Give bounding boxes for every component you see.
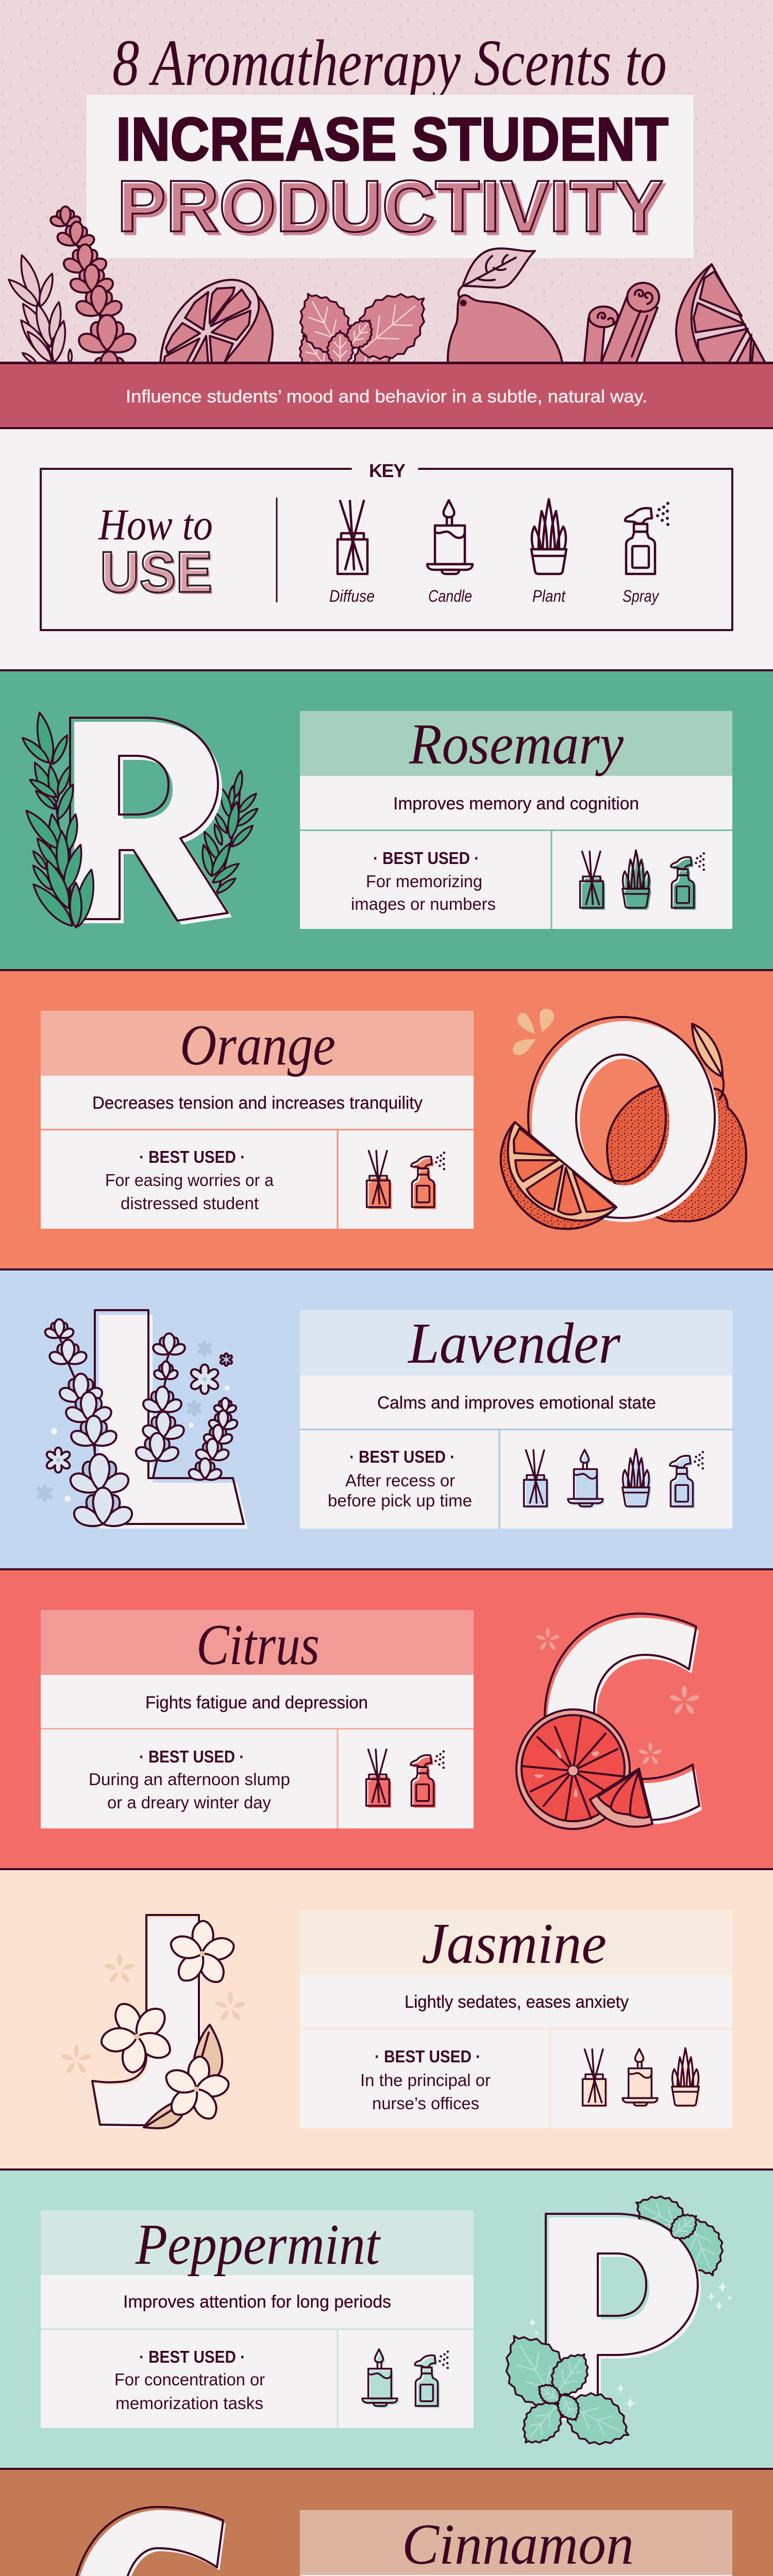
sparkles [528, 2280, 731, 2411]
lavender best used: After recess or [345, 1471, 455, 1490]
section: rosemary [0, 670, 773, 970]
jasmine background [0, 1869, 773, 2170]
mint leaves front [489, 2208, 703, 2457]
lavender best used: · BEST USED · [349, 1447, 455, 1466]
lavender sprigs [45, 1319, 237, 1526]
orange best used: For easing worries or a [105, 1171, 274, 1190]
panel body [300, 1910, 732, 2128]
panel: citrus [41, 1610, 474, 1828]
illustration: rosemary sprig [5, 253, 72, 365]
key: diffuse: Diffuse [329, 587, 375, 605]
title: increase student: INCREASE STUDENT [116, 105, 668, 174]
jasmine best used: In the principal or [360, 2071, 491, 2090]
citrus best used [89, 1747, 290, 1812]
how to use heading [98, 500, 214, 606]
lavender background [0, 1269, 773, 1569]
panel body [41, 1011, 474, 1229]
key: spray [623, 502, 669, 605]
key: candle [427, 500, 473, 605]
how to use heading: How to [98, 500, 213, 549]
header background [0, 0, 773, 364]
panel: jasmine [300, 1910, 732, 2128]
key: plant [531, 499, 566, 605]
illustration: orange wedge [676, 264, 767, 367]
rosemary best used: · BEST USED · [373, 849, 479, 868]
peppermint background [0, 2170, 773, 2469]
citrus background [0, 1569, 773, 1869]
title band [300, 2510, 732, 2575]
orange benefit: Decreases tension and increases tranquility [92, 1093, 423, 1113]
lavender best used: before pick up time [328, 1491, 472, 1510]
panel: rosemary [300, 711, 732, 929]
tagline: Influence students’ mood and behavior in a subtle, natural way. [126, 387, 647, 406]
section: peppermint [0, 2170, 773, 2469]
citrus icons [366, 1750, 447, 1808]
section: citrus [0, 1569, 773, 1869]
key heading: KEY [369, 460, 406, 481]
letter C [545, 1614, 702, 1824]
title band [41, 2210, 474, 2275]
decorative blooms [535, 1628, 700, 1766]
orange best used: distressed student [121, 1194, 259, 1213]
title script line: 8 Aromatherapy Scents to [112, 26, 667, 99]
section: cinnamon [0, 2469, 773, 2576]
lavender benefit: Calms and improves emotional state [377, 1393, 656, 1413]
title: productivity: PRODUCTIVITY [120, 168, 666, 250]
rosemary left sprig [20, 711, 98, 931]
separators [300, 2029, 732, 2128]
peppermint icons [362, 2349, 451, 2408]
separators [41, 1729, 474, 1828]
orange icons [367, 1151, 447, 1209]
letter R [70, 718, 232, 925]
section: jasmine [0, 1869, 773, 2170]
rosemary best used: images or numbers [351, 894, 496, 913]
title band [300, 1310, 732, 1376]
letter L [95, 1310, 248, 1529]
faint blossoms [60, 1954, 246, 2075]
jasmine best used: · BEST USED · [375, 2047, 481, 2066]
illustration: lemon with leaf [448, 248, 563, 367]
citrus best used: or a dreary winter day [107, 1793, 271, 1812]
separators [41, 1129, 474, 1229]
panel: lavender [300, 1310, 732, 1529]
citrus title: Citrus [196, 1613, 320, 1677]
panel body [300, 711, 732, 929]
orange background [0, 970, 773, 1269]
orange leaf [692, 1024, 724, 1099]
panel body [41, 1610, 474, 1828]
separators [41, 2329, 474, 2428]
cinnamon background [0, 2469, 773, 2576]
rosemary icons [580, 850, 707, 910]
juice drops [513, 1009, 554, 1055]
panel: peppermint [41, 2210, 474, 2428]
rosemary title: Rosemary [409, 713, 624, 776]
title: productivity: PRODUCTIVITY [117, 165, 663, 247]
decorative blossoms [37, 1340, 232, 1502]
key: spray: Spray [623, 587, 660, 605]
lavender title: Lavender [407, 1312, 620, 1376]
whole orange [607, 1086, 746, 1222]
section dividers [0, 669, 773, 2576]
jasmine icons [583, 2048, 701, 2108]
jasmine best used [360, 2047, 491, 2113]
section: orange [0, 970, 773, 1269]
rosemary best used [351, 849, 496, 913]
how to use heading: USE [100, 540, 212, 604]
peppermint best used: For concentration or [114, 2370, 265, 2389]
key: candle: Candle [428, 587, 472, 605]
illustration: orange half [160, 280, 273, 367]
jasmine best used: nurse’s offices [372, 2094, 479, 2113]
orange title: Orange [180, 1013, 335, 1077]
lavender icons [524, 1449, 706, 1509]
separators [300, 831, 732, 929]
lavender best used [328, 1447, 472, 1510]
separators [300, 1429, 732, 1529]
peppermint best used: · BEST USED · [139, 2347, 245, 2366]
citrus best used: · BEST USED · [139, 1747, 244, 1766]
illustration: cinnamon sticks [584, 283, 659, 367]
section: lavender [0, 1269, 773, 1569]
key: diffuse [329, 501, 375, 605]
header band [0, 363, 773, 428]
panel: cinnamon [300, 2510, 732, 2576]
citrus best used: During an afternoon slump [89, 1770, 290, 1789]
rosemary right sprig [199, 770, 260, 898]
illustration: mint leaves [287, 276, 443, 386]
letter P [546, 2214, 701, 2420]
mint leaves behind letter [626, 2185, 732, 2283]
peppermint title: Peppermint [135, 2213, 381, 2277]
title band [300, 1910, 732, 1975]
title band [41, 1011, 474, 1076]
peppermint benefit: Improves attention for long periods [123, 2292, 391, 2312]
header speckle texture [0, 0, 773, 364]
rosemary best used: For memorizing [366, 872, 482, 891]
rosemary benefit: Improves memory and cognition [393, 794, 639, 814]
cinnamon title: Cinnamon [402, 2513, 634, 2576]
grapefruit slice [516, 1709, 630, 1829]
panel: orange [41, 1011, 474, 1229]
letter O [528, 1017, 718, 1222]
jasmine flowers [88, 1918, 239, 2128]
rosemary background [0, 670, 773, 970]
citrus benefit: Fights fatigue and depression [145, 1693, 368, 1713]
grapefruit wedge [590, 1769, 652, 1827]
orange best used [105, 1147, 274, 1213]
letter J [92, 1915, 201, 2128]
header section [0, 0, 773, 429]
title band [300, 711, 732, 776]
peppermint best used: memorization tasks [115, 2394, 263, 2413]
illustration: lavender sprig [51, 207, 136, 385]
peppermint best used [114, 2347, 265, 2413]
jasmine title: Jasmine [422, 1912, 607, 1976]
panel body [41, 2210, 474, 2428]
key frame [41, 469, 732, 630]
letter C [72, 2507, 229, 2576]
panel body [300, 1310, 732, 1529]
title white box [87, 95, 694, 258]
key: plant: Plant [532, 587, 566, 605]
key section [41, 460, 732, 630]
jasmine leaves [144, 2025, 222, 2128]
key divider [276, 498, 277, 602]
orange slice [501, 1122, 616, 1229]
panel body [300, 2510, 732, 2576]
title band [41, 1610, 474, 1675]
how to use heading: USE [102, 542, 214, 606]
jasmine benefit: Lightly sedates, eases anxiety [405, 1992, 629, 2012]
orange best used: · BEST USED · [139, 1147, 245, 1166]
